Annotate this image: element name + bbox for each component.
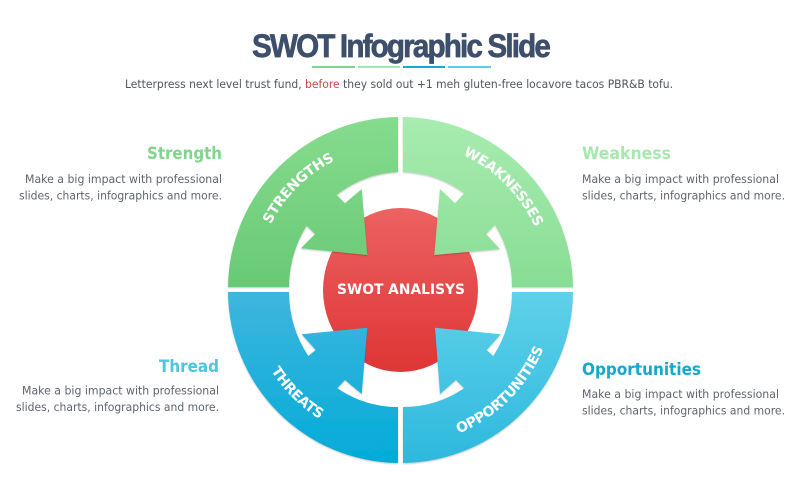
description: strength (19, 172, 222, 202)
panel: opportunities (582, 360, 785, 418)
heading: opportunities: Opportunities (582, 360, 701, 379)
segment: weaknesses arrow (402, 117, 574, 288)
description: opportunities: slides, charts, infographics and more. (582, 404, 785, 418)
description: weakness: Make a big impact with professional (582, 172, 779, 186)
subtitle: Letterpress next level trust fund, before they sold out +1 meh gluten-free locavore tacos PBR&B tofu. (125, 77, 673, 91)
heading: thread: Thread (159, 357, 219, 376)
description: thread (16, 384, 219, 414)
panel: thread (16, 357, 219, 414)
heading: weakness: Weakness (582, 144, 671, 163)
description: opportunities (582, 387, 785, 418)
description: weakness (582, 172, 785, 202)
segment: opportunities arrow (402, 292, 574, 464)
panel: strength (19, 144, 222, 202)
heading: strength: Strength (147, 144, 222, 163)
label: weaknesses: WEAKNESSES (466, 146, 544, 226)
segment: threats arrow (228, 292, 398, 464)
description: thread: slides, charts, infographics and more. (16, 400, 219, 414)
description: strength: Make a big impact with professional (25, 172, 222, 186)
segment: strengths arrow (228, 117, 398, 288)
title: SWOT Infographic Slide (252, 28, 550, 64)
description: thread: Make a big impact with professional (22, 384, 219, 398)
title underline bars (312, 66, 491, 68)
center label: SWOT ANALISYS (337, 282, 465, 298)
description: strength: slides, charts, infographics and more. (19, 188, 222, 202)
label: opportunities: OPPORTUNITIES (456, 346, 542, 432)
center circle (323, 208, 478, 372)
description: opportunities: Make a big impact with professional (582, 387, 779, 401)
label: strengths: STRENGTHS (263, 152, 333, 224)
label: threats: THREATS (273, 365, 324, 418)
panel: weakness (582, 144, 785, 202)
description: weakness: slides, charts, infographics and more. (582, 188, 785, 202)
SWOT diagram (228, 117, 574, 464)
